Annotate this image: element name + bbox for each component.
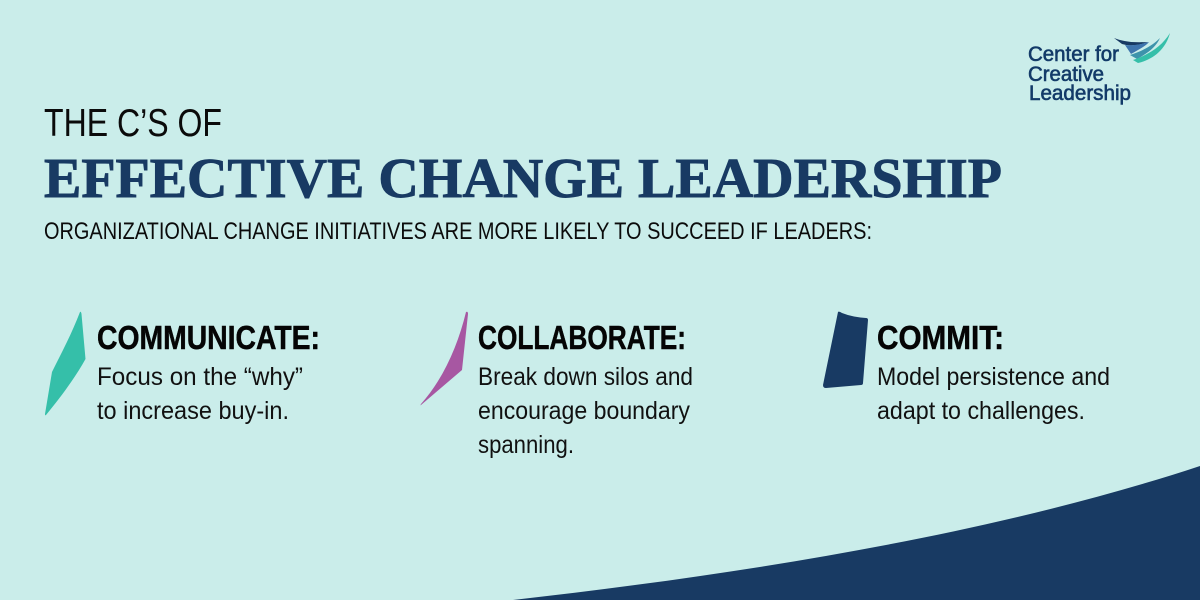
navy curved corner shape	[513, 466, 1200, 600]
logo wordmark: Center for	[1028, 43, 1119, 66]
panel: commit	[823, 312, 1110, 425]
icon: purple shard	[420, 312, 468, 405]
text: communicate description: Focus on the “why”	[97, 363, 303, 391]
logo wordmark: Creative	[1028, 63, 1104, 86]
title line: Effective Change Leadership: EFFECTIVE CHANGE LEADERSHIP	[44, 148, 1002, 210]
heading: commit: COMMIT:	[877, 319, 1004, 356]
text: communicate description: to increase buy-in.	[97, 397, 289, 425]
logo: Center for Creative Leadership	[1028, 33, 1170, 105]
heading: communicate: COMMUNICATE:	[97, 319, 320, 356]
text: commit description	[877, 363, 1110, 425]
icon: navy shard	[823, 312, 868, 388]
icon: teal shard	[45, 312, 86, 415]
text: communicate description	[97, 363, 303, 425]
logo wordmark: Leadership	[1029, 82, 1131, 105]
subtitle: ORGANIZATIONAL CHANGE INITIATIVES ARE MORE LIKELY TO SUCCEED IF LEADERS:	[44, 218, 872, 245]
text: collaborate description	[478, 363, 693, 459]
text: collaborate description: spanning.	[478, 431, 574, 459]
logo swoosh icon	[1114, 33, 1170, 63]
text: collaborate description: encourage boundary	[478, 397, 690, 425]
heading: collaborate: COLLABORATE:	[478, 319, 686, 356]
title line: The C's of: THE C’S OF	[44, 102, 222, 145]
text: commit description: Model persistence and	[877, 363, 1110, 391]
panel: communicate	[45, 312, 320, 425]
text: commit description: adapt to challenges.	[877, 397, 1085, 425]
logo wordmark	[1028, 43, 1131, 105]
panel: collaborate	[420, 312, 693, 459]
text: collaborate description: Break down silos and	[478, 363, 693, 391]
